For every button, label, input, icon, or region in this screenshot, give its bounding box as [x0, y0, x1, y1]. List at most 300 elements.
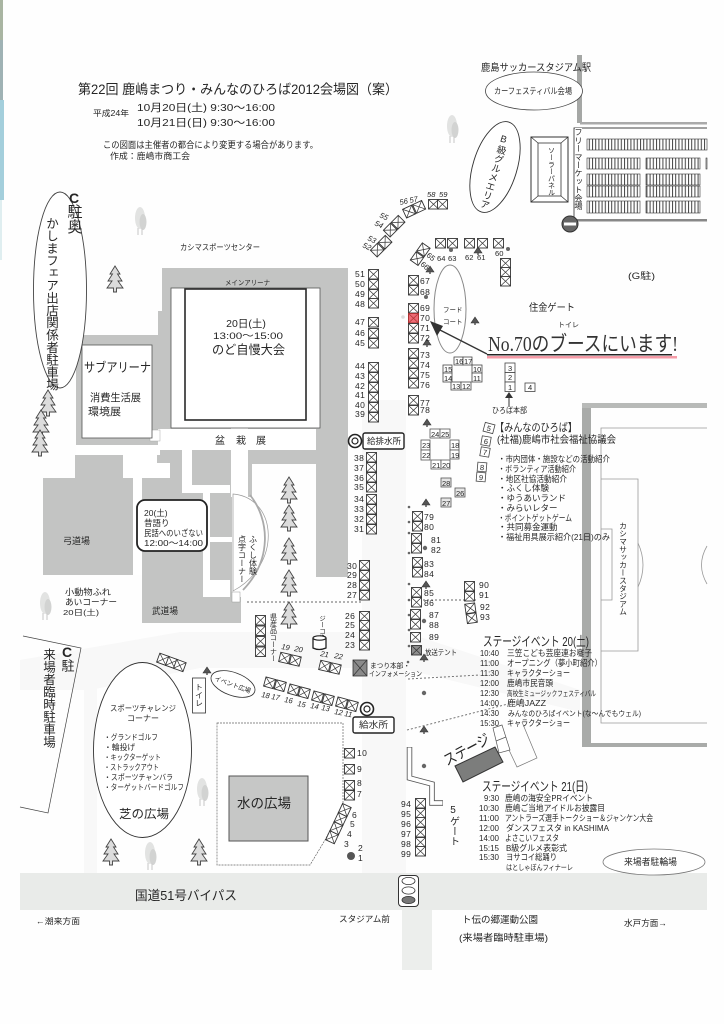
booths 94-99: 94 — [401, 799, 411, 809]
booths 18-28 hub: 22 — [422, 451, 430, 460]
booths 1-10: 4 — [347, 829, 352, 839]
callout: folk tales: 12:00～14:00 — [144, 538, 203, 548]
bottom direction labels: スタジアム前 — [339, 914, 391, 924]
left oval: Kashima fair parking: 駐奥 — [66, 204, 82, 234]
booths 11-22 row: 20 — [293, 644, 304, 655]
stage events Oct 21: 鹿嶋の海安全PRイベント — [505, 793, 593, 803]
left oval: Kashima fair parking: かしまフェア出店関係者駐車場 — [44, 217, 58, 391]
arrow up to hiroba headquarters — [505, 392, 513, 407]
booths 10-17 hub: 12 — [462, 382, 470, 391]
fukushi experience corner — [233, 494, 268, 591]
booths 11-22 row: 11 — [344, 709, 353, 719]
turf plaza: sports challenge corner: 芝の広場 — [119, 807, 169, 821]
stage events Oct 20: 12:30 — [480, 688, 499, 698]
booths 94-99: 98 — [401, 839, 411, 849]
booths 1-10 — [326, 748, 367, 863]
booths 31-38 column — [354, 452, 376, 534]
booths 39-51 column: 41 — [355, 390, 365, 400]
water supply point (upper): 給排水所 — [367, 436, 401, 446]
stage events Oct 20: 10:40 — [480, 648, 499, 658]
booths 79-89 — [410, 512, 441, 642]
sub arena: 消費生活展 — [90, 391, 141, 404]
booths 23-30 column: 30 — [347, 561, 357, 571]
callout: folk tales: 民話へのいざない — [144, 528, 203, 538]
stage — [441, 722, 537, 782]
stage events Oct 20: キャラクターショー — [507, 718, 570, 728]
main arena: メインアリーナ — [225, 279, 270, 287]
booths 67-78: 78 — [420, 405, 430, 415]
main arena — [171, 279, 320, 428]
main arena: 13:00～15:00 — [213, 331, 283, 342]
Zico statue: ジーコ像 — [318, 615, 326, 641]
booths 90-93: 93 — [480, 612, 490, 622]
panel: minna no hiroba participants: ・地区社協活動紹介 — [498, 474, 567, 484]
booths near sports oval — [157, 653, 186, 672]
booths 52-59 arc: 57 — [409, 194, 419, 205]
booths 67-78: 72 — [420, 333, 430, 343]
booths 10-17 hub: 15 — [444, 365, 452, 374]
sub arena: 環境展 — [88, 406, 122, 418]
water supply point (lower) — [353, 702, 394, 733]
booths 79-89: 83 — [424, 559, 434, 569]
panel: minna no hiroba participants: ・共同募金運動 — [498, 522, 558, 532]
stage events Oct 20: みんなのひろばイベント(な～んでもウェル) — [508, 709, 641, 718]
corridors — [76, 420, 316, 602]
booths 39-51 column: 51 — [355, 269, 365, 279]
booths 39-51 column: 49 — [355, 289, 365, 299]
martial arts hall label: 武道場 — [152, 605, 178, 616]
booths 11-22 row: 22 — [333, 651, 344, 662]
booths 5-9: 7 — [482, 448, 488, 457]
booths 5-9 — [476, 422, 495, 482]
header note — [103, 139, 318, 161]
road: national route 51 bypass — [20, 873, 707, 910]
booths 1-10: 3 — [344, 839, 349, 849]
booths 23-30 column: 27 — [347, 590, 357, 600]
booths 60-66: 61 — [477, 253, 485, 262]
booths 11-22 row: 21 — [319, 649, 330, 659]
booths 18-28 hub: 19 — [451, 451, 459, 460]
booths 18-28 hub — [421, 429, 465, 508]
booths 10-17 hub: 14 — [444, 374, 452, 383]
booths 79-89: 84 — [424, 569, 434, 579]
booths 39-51 column: 45 — [355, 338, 365, 348]
booths 94-99: 99 — [401, 849, 411, 859]
stage events Oct 21: 15:30 — [479, 852, 499, 862]
C parking area: 来場者臨時駐車場 — [41, 648, 55, 748]
stage events Oct 21: 10:30 — [479, 803, 499, 813]
booths 39-51 column: 40 — [355, 400, 365, 410]
stage events Oct 21: ダンスフェスタ in KASHIMA — [506, 823, 609, 833]
booths 31-38 column: 34 — [354, 494, 364, 504]
stage events Oct 20 — [480, 634, 641, 728]
booths 52-59 arc: 53 — [366, 234, 378, 246]
bicycle parking oval — [603, 849, 705, 875]
panel: minna no hiroba participants: 【みんなのひろば】 — [495, 421, 577, 434]
stage events Oct 20: 高校生ミュージックフェスティバル — [507, 688, 596, 698]
stage events Oct 21: 12:00 — [479, 823, 499, 833]
bonsai exhibition label — [215, 434, 266, 447]
booths 52-59 arc: 55 — [378, 211, 390, 223]
booths 1-10: 10 — [357, 748, 367, 758]
food court: コート — [443, 318, 462, 326]
prefectural products corner — [256, 613, 277, 662]
booths 31-38 column: 31 — [354, 524, 364, 534]
small animal corner — [63, 587, 117, 617]
event plaza: イベント広場 — [213, 674, 253, 695]
booths 67-78 — [408, 276, 430, 415]
header dates: 10月20日(土) 9:30～16:00 — [137, 101, 275, 114]
stadium — [582, 403, 707, 747]
C parking area: C — [62, 644, 72, 660]
prefectural products corner: 県産品コーナー — [270, 613, 277, 662]
station label: 鹿島サッカースタジアム駅 — [481, 61, 591, 74]
bottom direction labels: (来場者臨時駐車場) — [459, 932, 548, 944]
handwritten note: at booth 70: No.70のブースにいます! — [488, 332, 678, 356]
booths 60-66: 60 — [495, 249, 503, 258]
booths 60-66: 64 — [437, 254, 445, 263]
fukushi experience corner: ふくし体験 — [248, 535, 258, 576]
food court: フード — [443, 306, 462, 314]
main arena: 20日(土) — [226, 317, 266, 330]
booths 31-38 column: 35 — [354, 482, 364, 492]
booths 1-10: 2 — [358, 843, 363, 853]
header note: 作成：鹿嶋市商工会 — [110, 151, 191, 161]
bicycle parking oval: 来場者駐輪場 — [624, 856, 677, 867]
building mass: Kashima Sports Center — [43, 268, 348, 623]
bottom direction labels — [36, 914, 667, 944]
stage events Oct 20: 12:00 — [480, 678, 499, 688]
label: Kashima Sports Center: カシマスポーツセンター — [180, 243, 260, 252]
booths 67-78: 69 — [420, 303, 430, 313]
scan edge strip — [0, 0, 4, 260]
stage events Oct 20: 15:30 — [480, 718, 499, 728]
booths 1-4: 3 — [508, 364, 512, 373]
booths 79-89: 81 — [431, 535, 441, 545]
archery hall label: 弓道場 — [63, 535, 90, 546]
bonsai exhibition label: 展 — [256, 435, 266, 447]
turf plaza: sports challenge corner: ・グランドゴルフ — [104, 732, 158, 742]
booths 1-4: 4 — [528, 383, 532, 392]
festival headquarters and information: まつり本部・ — [370, 661, 410, 670]
booths 39-51 column: 47 — [355, 317, 365, 327]
C parking area: 駐 — [60, 659, 74, 673]
booths 67-78: 75 — [420, 370, 430, 380]
turf plaza: sports challenge corner: コーナー — [127, 714, 159, 723]
booths 11-22 row: 18 — [261, 690, 271, 701]
panel: minna no hiroba participants: (社福)鹿嶋市社会福祉協議会 — [497, 433, 616, 446]
booths 67-78: 71 — [420, 323, 430, 333]
booths 79-89: 79 — [424, 512, 434, 522]
booths 1-4: 2 — [508, 373, 512, 382]
small animal corner: 20日(土) — [63, 607, 100, 617]
turf plaza: sports challenge corner: ・ストラックアウト — [104, 763, 159, 772]
booths 1-4 — [505, 363, 535, 392]
stage events Oct 21: ヨサコイ総踊り — [506, 852, 557, 862]
booths 10-17 hub: 17 — [464, 357, 472, 366]
booth: broadcast tent — [412, 646, 457, 657]
water supply point (lower): 給水所 — [359, 719, 388, 730]
callout: folk tales — [137, 500, 207, 551]
booths 94-99: 97 — [401, 829, 411, 839]
main arena: のど自慢大会 — [212, 342, 285, 357]
booths 79-89: 80 — [424, 522, 434, 532]
panel: minna no hiroba participants — [495, 421, 616, 542]
panel: minna no hiroba participants: ・みらいレター — [498, 503, 558, 513]
booths 23-30 column — [345, 560, 370, 650]
booths 79-89: 82 — [431, 545, 441, 555]
booths 79-89: 87 — [429, 610, 439, 620]
panel: minna no hiroba participants: ・ポイントゲットゲーム — [498, 513, 572, 523]
oval: B-class gourmet area — [460, 116, 530, 218]
arrow to booth 70 — [430, 321, 487, 354]
bottom direction labels: 水戸方面→ — [624, 918, 667, 928]
left oval: Kashima fair parking: C — [69, 190, 79, 206]
booths 39-51 column: 46 — [355, 328, 365, 338]
dashed route lines — [247, 600, 512, 730]
panel: minna no hiroba participants: ・福祉用具展示紹介(21日)のみ — [498, 532, 610, 542]
booths 11-22 row: 17 — [271, 692, 281, 703]
fukushi experience corner: 点字コーナー — [238, 535, 246, 583]
stage events Oct 20: キャラクターショー — [507, 668, 570, 678]
booths 23-30 column: 25 — [345, 620, 355, 630]
event plaza — [207, 665, 259, 703]
booths 1-10: 7 — [357, 789, 362, 799]
festival headquarters and information: インフォメーション — [369, 670, 422, 678]
callout: folk tales: 昔語り — [144, 518, 170, 528]
stage events Oct 21: よさこいフェスタ — [505, 833, 559, 843]
turf plaza: sports challenge corner — [94, 662, 192, 838]
G parking label: (G駐) — [628, 270, 655, 281]
booths 67-78: 68 — [420, 287, 430, 297]
water plaza — [217, 723, 343, 865]
booths 90-93: 90 — [479, 580, 489, 590]
booth: broadcast tent: 放送テント — [425, 647, 457, 657]
booths 18-28 hub: 23 — [422, 441, 430, 450]
stage events Oct 21: アントラーズ選手トークショー＆ジャンケン大会 — [505, 813, 653, 823]
booths 60-66: 62 — [465, 253, 473, 262]
header note: この図面は主催者の都合により変更する場合があります。 — [103, 139, 318, 150]
Zico statue — [313, 615, 326, 650]
small markers — [401, 247, 510, 768]
booths 67-78: 74 — [420, 360, 430, 370]
booths 39-51 column: 39 — [355, 409, 365, 419]
booths 67-78: 73 — [420, 350, 430, 360]
booths 1-10: 9 — [357, 764, 362, 774]
booths 52-59 arc: 52 — [361, 241, 373, 253]
bottom direction labels: ト伝の郷運動公園 — [462, 914, 538, 926]
booths 1-4: 1 — [508, 383, 512, 392]
booths 79-89: 88 — [429, 620, 439, 630]
booths 39-51 column: 50 — [355, 279, 365, 289]
booths 90-93: 91 — [479, 590, 489, 600]
water supply point (upper) — [348, 433, 404, 449]
booths 79-89: 85 — [424, 588, 434, 598]
booths 94-99 — [401, 798, 426, 859]
flea market venue — [574, 122, 707, 222]
panel: minna no hiroba participants: ・ゆうあいランド — [498, 493, 566, 503]
gate 5 label: 5ゲート — [448, 805, 460, 846]
stage events Oct 21: はとしゃぼんフィナーレ — [506, 863, 573, 872]
toilet — [192, 678, 206, 713]
booths 94-99: 96 — [401, 819, 411, 829]
booths 18-28 hub: 18 — [451, 441, 459, 450]
booths 10-17 hub: 10 — [473, 365, 481, 374]
booths 18-28 hub: 24 — [431, 430, 439, 439]
bonsai exhibition label: 盆 — [215, 434, 225, 447]
panel: minna no hiroba participants: ・ふくし体験 — [498, 483, 550, 493]
booths 5-9: 6 — [483, 437, 489, 446]
booths 39-51 column: 48 — [355, 299, 365, 309]
booths 10-17 hub: 11 — [473, 374, 481, 383]
booths 39-51 column: 44 — [355, 361, 365, 371]
station road — [577, 55, 582, 123]
stage events Oct 20: オープニング（夢小町紹介） — [507, 658, 602, 668]
booths 11-22 row: 16 — [284, 695, 294, 706]
faint ghost roads — [20, 400, 580, 970]
booths 52-59 arc: 59 — [439, 190, 448, 199]
stage events Oct 21: 鹿嶋ご当地アイドルお披露目 — [505, 803, 605, 813]
booths 5-9: 8 — [480, 463, 485, 472]
stadium: カシマサッカースタジアム — [618, 522, 628, 616]
turf plaza: sports challenge corner: ・キックターゲット — [104, 753, 161, 762]
booths 31-38 column: 32 — [354, 514, 364, 524]
water plaza: 水の広場 — [237, 796, 291, 811]
booths 23-30 column: 29 — [347, 570, 357, 580]
booths 23-30 column: 26 — [345, 611, 355, 621]
booths 52-59 arc: 54 — [373, 219, 385, 230]
stage events Oct 20: 三笠こども芸座連お囃子 — [507, 648, 592, 658]
booths 67-78: 76 — [420, 380, 430, 390]
booths 1-10: 5 — [350, 819, 355, 829]
booths 10-17 hub — [443, 357, 482, 391]
C parking area — [20, 636, 81, 813]
festival headquarters and information — [353, 660, 422, 678]
booths 11-22 row: 12 — [334, 707, 344, 718]
booths 60-66 — [410, 238, 510, 286]
booths 1-10: 8 — [357, 778, 362, 788]
stage events Oct 20: 11:00 — [480, 658, 499, 668]
booths 79-89: 89 — [429, 632, 439, 642]
stage events Oct 21: ステージイベント 21(日) — [482, 779, 588, 794]
toilet: トイレ — [194, 683, 204, 707]
stage events Oct 21 — [479, 779, 653, 872]
booths 11-22 row: 15 — [297, 699, 307, 710]
callout: folk tales: 20(土) — [144, 508, 168, 518]
small animal corner: あいコーナー — [65, 597, 117, 607]
stage events Oct 21: 9:30 — [484, 793, 499, 803]
booths 18-28 hub: 20 — [442, 461, 450, 470]
stage events Oct 21: B級グルメ表彰式 — [506, 843, 567, 853]
icon: traffic light — [398, 876, 418, 906]
turf plaza: sports challenge corner: ・輪投げ — [104, 742, 135, 752]
booths 31-38 column: 36 — [354, 473, 364, 483]
stage events Oct 20: 11:30 — [480, 668, 499, 678]
stage events Oct 21: 15:15 — [479, 843, 499, 853]
booths 94-99: 95 — [401, 809, 411, 819]
booths 52-59 arc — [361, 190, 448, 257]
oval: car festival venue — [486, 72, 582, 110]
booths 23-30 column: 28 — [347, 580, 357, 590]
stage events Oct 20: 鹿嶋JAZZ — [507, 698, 546, 708]
left oval: Kashima fair parking — [34, 190, 86, 391]
trees — [32, 115, 482, 870]
food court — [434, 265, 466, 353]
road: national route 51 bypass: 国道51号バイパス — [135, 888, 237, 903]
stage: ステージ — [441, 731, 493, 770]
booths 11-22 row: 19 — [281, 642, 291, 653]
turf plaza: sports challenge corner: スポーツチャレンジ — [110, 704, 176, 713]
booths 67-78: 67 — [420, 276, 430, 286]
booths 18-28 hub: 27 — [442, 499, 450, 508]
booths 11-22 row: 14 — [310, 701, 320, 711]
stage events Oct 21: 14:00 — [479, 833, 499, 843]
stage events Oct 21: 11:00 — [479, 813, 499, 823]
booths 10-17 hub: 13 — [452, 382, 460, 391]
flea market venue: フリーマーケット会場 — [574, 128, 583, 211]
booths 18-28 hub: 21 — [432, 461, 440, 470]
booths 31-38 column: 33 — [354, 504, 364, 514]
oval: B-class gourmet area: B級グルメエリア — [477, 133, 511, 210]
turf plaza: sports challenge corner: ・スポーツチャンバラ — [104, 773, 173, 782]
booths 1-10: 1 — [358, 853, 363, 863]
booths 11-22 row — [261, 642, 358, 719]
booths 31-38 column: 38 — [354, 453, 364, 463]
booths 31-38 column: 37 — [354, 463, 364, 473]
icon: no-entry sign — [562, 216, 578, 232]
booths 60-66: 63 — [448, 254, 456, 263]
booths 39-51 column — [355, 269, 378, 422]
booths 10-17 hub: 16 — [455, 357, 463, 366]
booths 23-30 column: 24 — [345, 630, 355, 640]
solar panel — [531, 137, 568, 202]
small animal corner: 小動物ふれ — [65, 587, 112, 597]
panel: minna no hiroba participants: ・市内団体・施設などの活動紹介 — [498, 454, 610, 464]
stage events Oct 20: 鹿嶋市民音頭 — [507, 678, 553, 688]
booths 5-9: 5 — [486, 424, 492, 433]
booths 90-93: 92 — [480, 602, 490, 612]
title: 第22回 鹿嶋まつり・みんなのひろば2012会場図（案） — [78, 81, 398, 97]
oval: car festival venue: カーフェスティバル会場 — [494, 86, 572, 96]
stage events Oct 20: ステージイベント 20(土) — [483, 634, 589, 649]
booths 18-28 hub: 28 — [442, 479, 450, 488]
gate wall — [410, 747, 443, 803]
booths 52-59 arc: 58 — [427, 190, 436, 199]
sub arena — [82, 345, 152, 438]
booths 67-78: 70 — [420, 313, 430, 323]
booths 60-66: 65 — [425, 251, 437, 263]
header dates — [93, 101, 275, 129]
booths 18-28 hub: 25 — [441, 430, 449, 439]
header dates: 10月21日(日) 9:30～16:00 — [137, 117, 275, 129]
booths 11-22 row: 13 — [321, 703, 331, 714]
turf plaza: sports challenge corner: ・ターゲットバードゴルフ — [104, 782, 184, 792]
sub arena: サブアリーナ — [84, 360, 151, 375]
bonsai exhibition label: 栽 — [236, 434, 246, 447]
Sumikin gate label: 住金ゲート — [529, 301, 575, 314]
booths 5-9: 9 — [479, 473, 484, 482]
label: hiroba headquarters: ひろば本部 — [492, 405, 527, 415]
booths 67-78: 77 — [420, 398, 430, 408]
booths 39-51 column: 43 — [355, 371, 365, 381]
booths 18-28 hub: 26 — [456, 489, 464, 498]
panel: minna no hiroba participants: ・ボランティア活動紹介 — [498, 464, 576, 474]
booths 79-89: 86 — [424, 598, 434, 608]
bottom direction labels: ←潮来方面 — [36, 916, 80, 926]
toilet label: トイレ — [558, 322, 579, 329]
solar panel: ソーラーパネル — [548, 147, 555, 196]
booths 23-30 column: 23 — [345, 640, 355, 650]
